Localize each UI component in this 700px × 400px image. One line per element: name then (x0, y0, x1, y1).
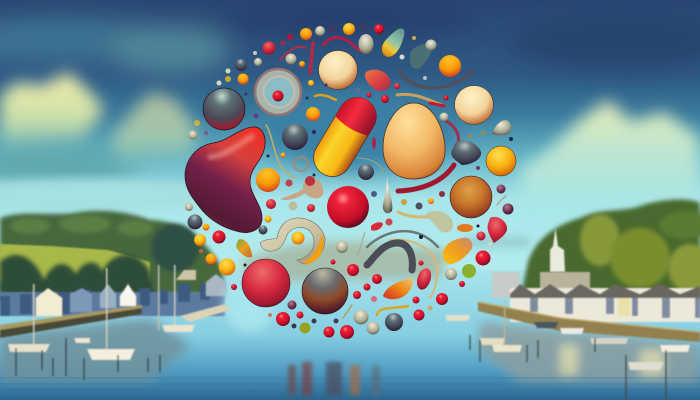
icon: church steeple (550, 228, 565, 272)
shape: bean with red top (280, 176, 323, 200)
background: left harbour houses and quay (0, 270, 226, 338)
sphere: orange centre left (256, 168, 280, 192)
sphere: mottled dark lower (302, 268, 348, 314)
shape: dark stone (451, 140, 481, 165)
shape: red oval (414, 267, 434, 291)
shape: large tan egg (383, 103, 445, 179)
strands: curved lines (266, 37, 506, 318)
sphere: cream top (318, 50, 358, 90)
reflection in the water (288, 362, 380, 396)
shape: red drop (488, 217, 507, 243)
dots: small spheres around the circle (185, 23, 514, 339)
background: sky with clouds (0, 0, 700, 270)
shape: cream and dark pebble (492, 120, 511, 135)
boats and masts: right marina (445, 300, 690, 400)
shape: cream and red pill (358, 34, 374, 54)
sphere: dark small centre (282, 124, 308, 150)
background: faint distant shore behind the cluster (240, 238, 530, 282)
shape: teal stone (410, 44, 432, 69)
shape: red orange leaf (383, 278, 413, 299)
shape: red and yellow capsule (307, 90, 383, 184)
sphere: orange top right (439, 55, 461, 77)
sphere: yellow right (486, 146, 516, 176)
shape: orange small bean (457, 224, 473, 232)
sphere: mottled orange planet (450, 176, 492, 218)
sphere: big red lower left (242, 259, 290, 307)
shape: dark grey arc (367, 243, 412, 270)
shape: mint and yellow leaf (382, 28, 405, 57)
shape: green and yellow leaf (236, 239, 252, 257)
cluster: organic shapes forming a circle (185, 23, 516, 339)
background: left wooded hills and field (0, 211, 225, 300)
boats and masts: left marina (8, 265, 230, 380)
shape: ring with red centre (255, 69, 301, 115)
background: right harbour houses and sea wall (478, 272, 700, 342)
shape: yellow tan blob (443, 238, 472, 264)
sphere: cream right (454, 86, 494, 124)
shape: cream swoosh (260, 218, 325, 264)
shape: large red maroon blob (185, 127, 265, 232)
shape: red orange pebble (365, 70, 391, 91)
sphere: glossy red centre (327, 186, 369, 228)
background: right wooded hill and church (520, 200, 700, 300)
shape: teardrop stem (383, 175, 392, 213)
shape: beige comma (425, 211, 453, 232)
sphere: dark grey (203, 88, 245, 130)
background: calm harbour water (0, 270, 700, 400)
